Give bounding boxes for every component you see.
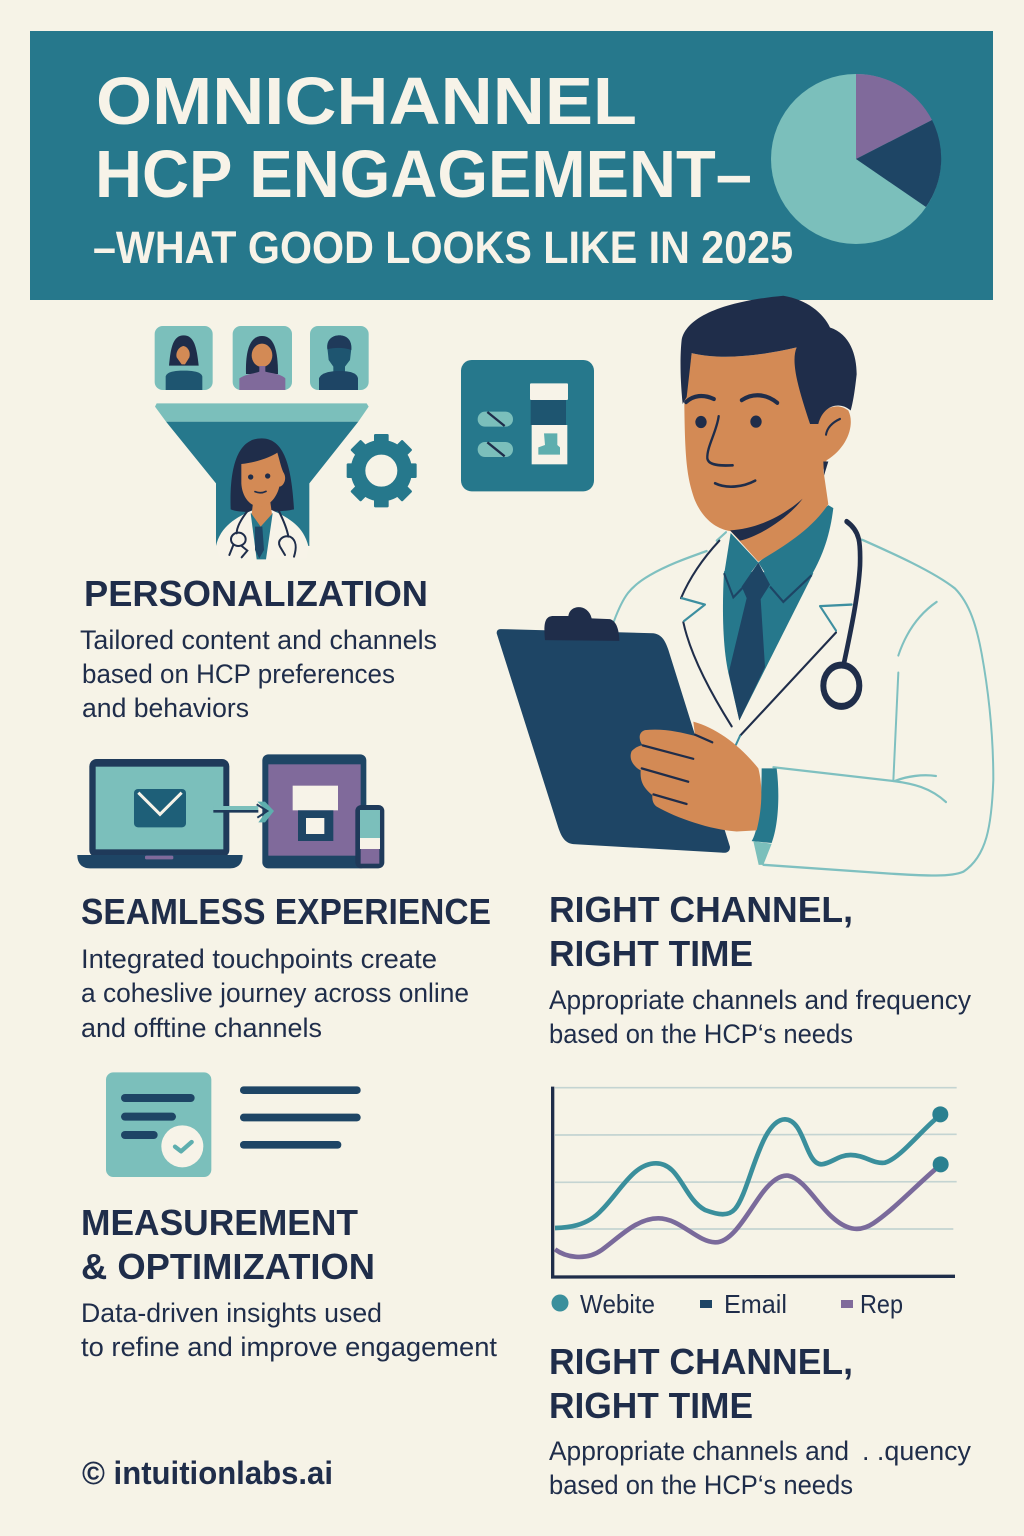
chart legend: Email: [724, 1289, 787, 1319]
laptop: [77, 759, 243, 868]
line chart: [553, 1087, 957, 1277]
section: right channel, right time: [549, 889, 971, 1049]
icon: woman doctor: [216, 438, 308, 559]
section: measurement and optimization: [81, 1202, 498, 1362]
shirt and tie: [723, 505, 833, 721]
title: [93, 64, 793, 273]
chart legend: Webite: [580, 1289, 655, 1319]
text: personalization body: based on HCP preferences: [82, 659, 395, 689]
coat lapels: [681, 541, 852, 745]
heading: measurement: [81, 1202, 375, 1287]
text: measurement body: [81, 1298, 498, 1362]
phone: [355, 805, 384, 868]
heading: seamless experience: SEAMLESS EXPERIENCE: [81, 891, 491, 932]
pie chart: [771, 74, 941, 244]
section: seamless experience: [81, 891, 491, 1043]
text: right channel second body: . .quency: [862, 1436, 971, 1466]
text: personalization body: Tailored content and channels: [80, 625, 437, 655]
text: measurement body: to refine and improve engagement: [81, 1332, 498, 1362]
heading: right channel: RIGHT TIME: [549, 933, 753, 974]
arrow: [213, 802, 274, 822]
text: right channel second body: Appropriate channels and: [549, 1436, 849, 1466]
text: personalization body: and behaviors: [82, 693, 249, 723]
heading: measurement: & OPTIMIZATION: [81, 1246, 375, 1287]
text: seamless body: [81, 944, 469, 1043]
title: OMNICHANNEL: [96, 64, 637, 139]
stethoscope: [823, 522, 860, 706]
tablet: [262, 754, 366, 868]
chart legend: Rep: [860, 1289, 903, 1319]
illustration: personalization funnel: [155, 326, 594, 559]
copyright: © intuitionlabs.ai: [82, 1455, 333, 1491]
heading: measurement: MEASUREMENT: [81, 1202, 358, 1243]
icon: checklist document: [106, 1072, 361, 1177]
heading: right channel second: RIGHT TIME: [549, 1385, 753, 1426]
hand and cuff: [631, 722, 778, 865]
section: right channel, right time (second): [549, 1341, 971, 1500]
icon: medication card: [461, 360, 594, 491]
chart legend: [552, 1289, 903, 1319]
icon: funnel: [155, 403, 369, 546]
text: seamless body: and offtine channels: [81, 1013, 322, 1043]
head: [681, 296, 857, 562]
icon: avatar 3: [310, 326, 369, 390]
text: measurement body: Data-driven insights used: [81, 1298, 382, 1328]
icon: gear: [347, 434, 417, 507]
series: website: [555, 1117, 938, 1228]
text: seamless body: a coheslive journey across online: [81, 978, 469, 1008]
icon: laptop, tablet and phone: [77, 754, 384, 868]
heading: right channel second: [549, 1341, 853, 1426]
text: right channel second body: [549, 1436, 971, 1500]
clipboard: [497, 607, 730, 853]
illustration: doctor with clipboard: [497, 296, 993, 876]
heading: right channel second: RIGHT CHANNEL,: [549, 1341, 853, 1382]
text: right channel body: [549, 985, 971, 1049]
coat outline: [614, 532, 993, 876]
title: HCP ENGAGEMENT–: [95, 137, 752, 212]
heading: right channel: RIGHT CHANNEL,: [549, 889, 853, 930]
header banner: [30, 31, 993, 300]
text: right channel body: based on the HCP‘s needs: [549, 1019, 853, 1049]
series: rep: [555, 1167, 938, 1257]
heading: personalization: PERSONALIZATION: [84, 573, 428, 614]
section: personalization: [80, 573, 437, 723]
text: right channel body: Appropriate channels and frequency: [549, 985, 971, 1015]
title: –WHAT GOOD LOOKS LIKE IN 2025: [93, 222, 793, 273]
heading: right channel: [549, 889, 853, 974]
text: right channel second body: based on the HCP‘s needs: [549, 1470, 853, 1500]
icon: avatar 2: [233, 326, 292, 390]
text: personalization body: [80, 625, 437, 723]
icon: avatar 1: [155, 326, 213, 390]
text: seamless body: Integrated touchpoints create: [81, 944, 437, 974]
